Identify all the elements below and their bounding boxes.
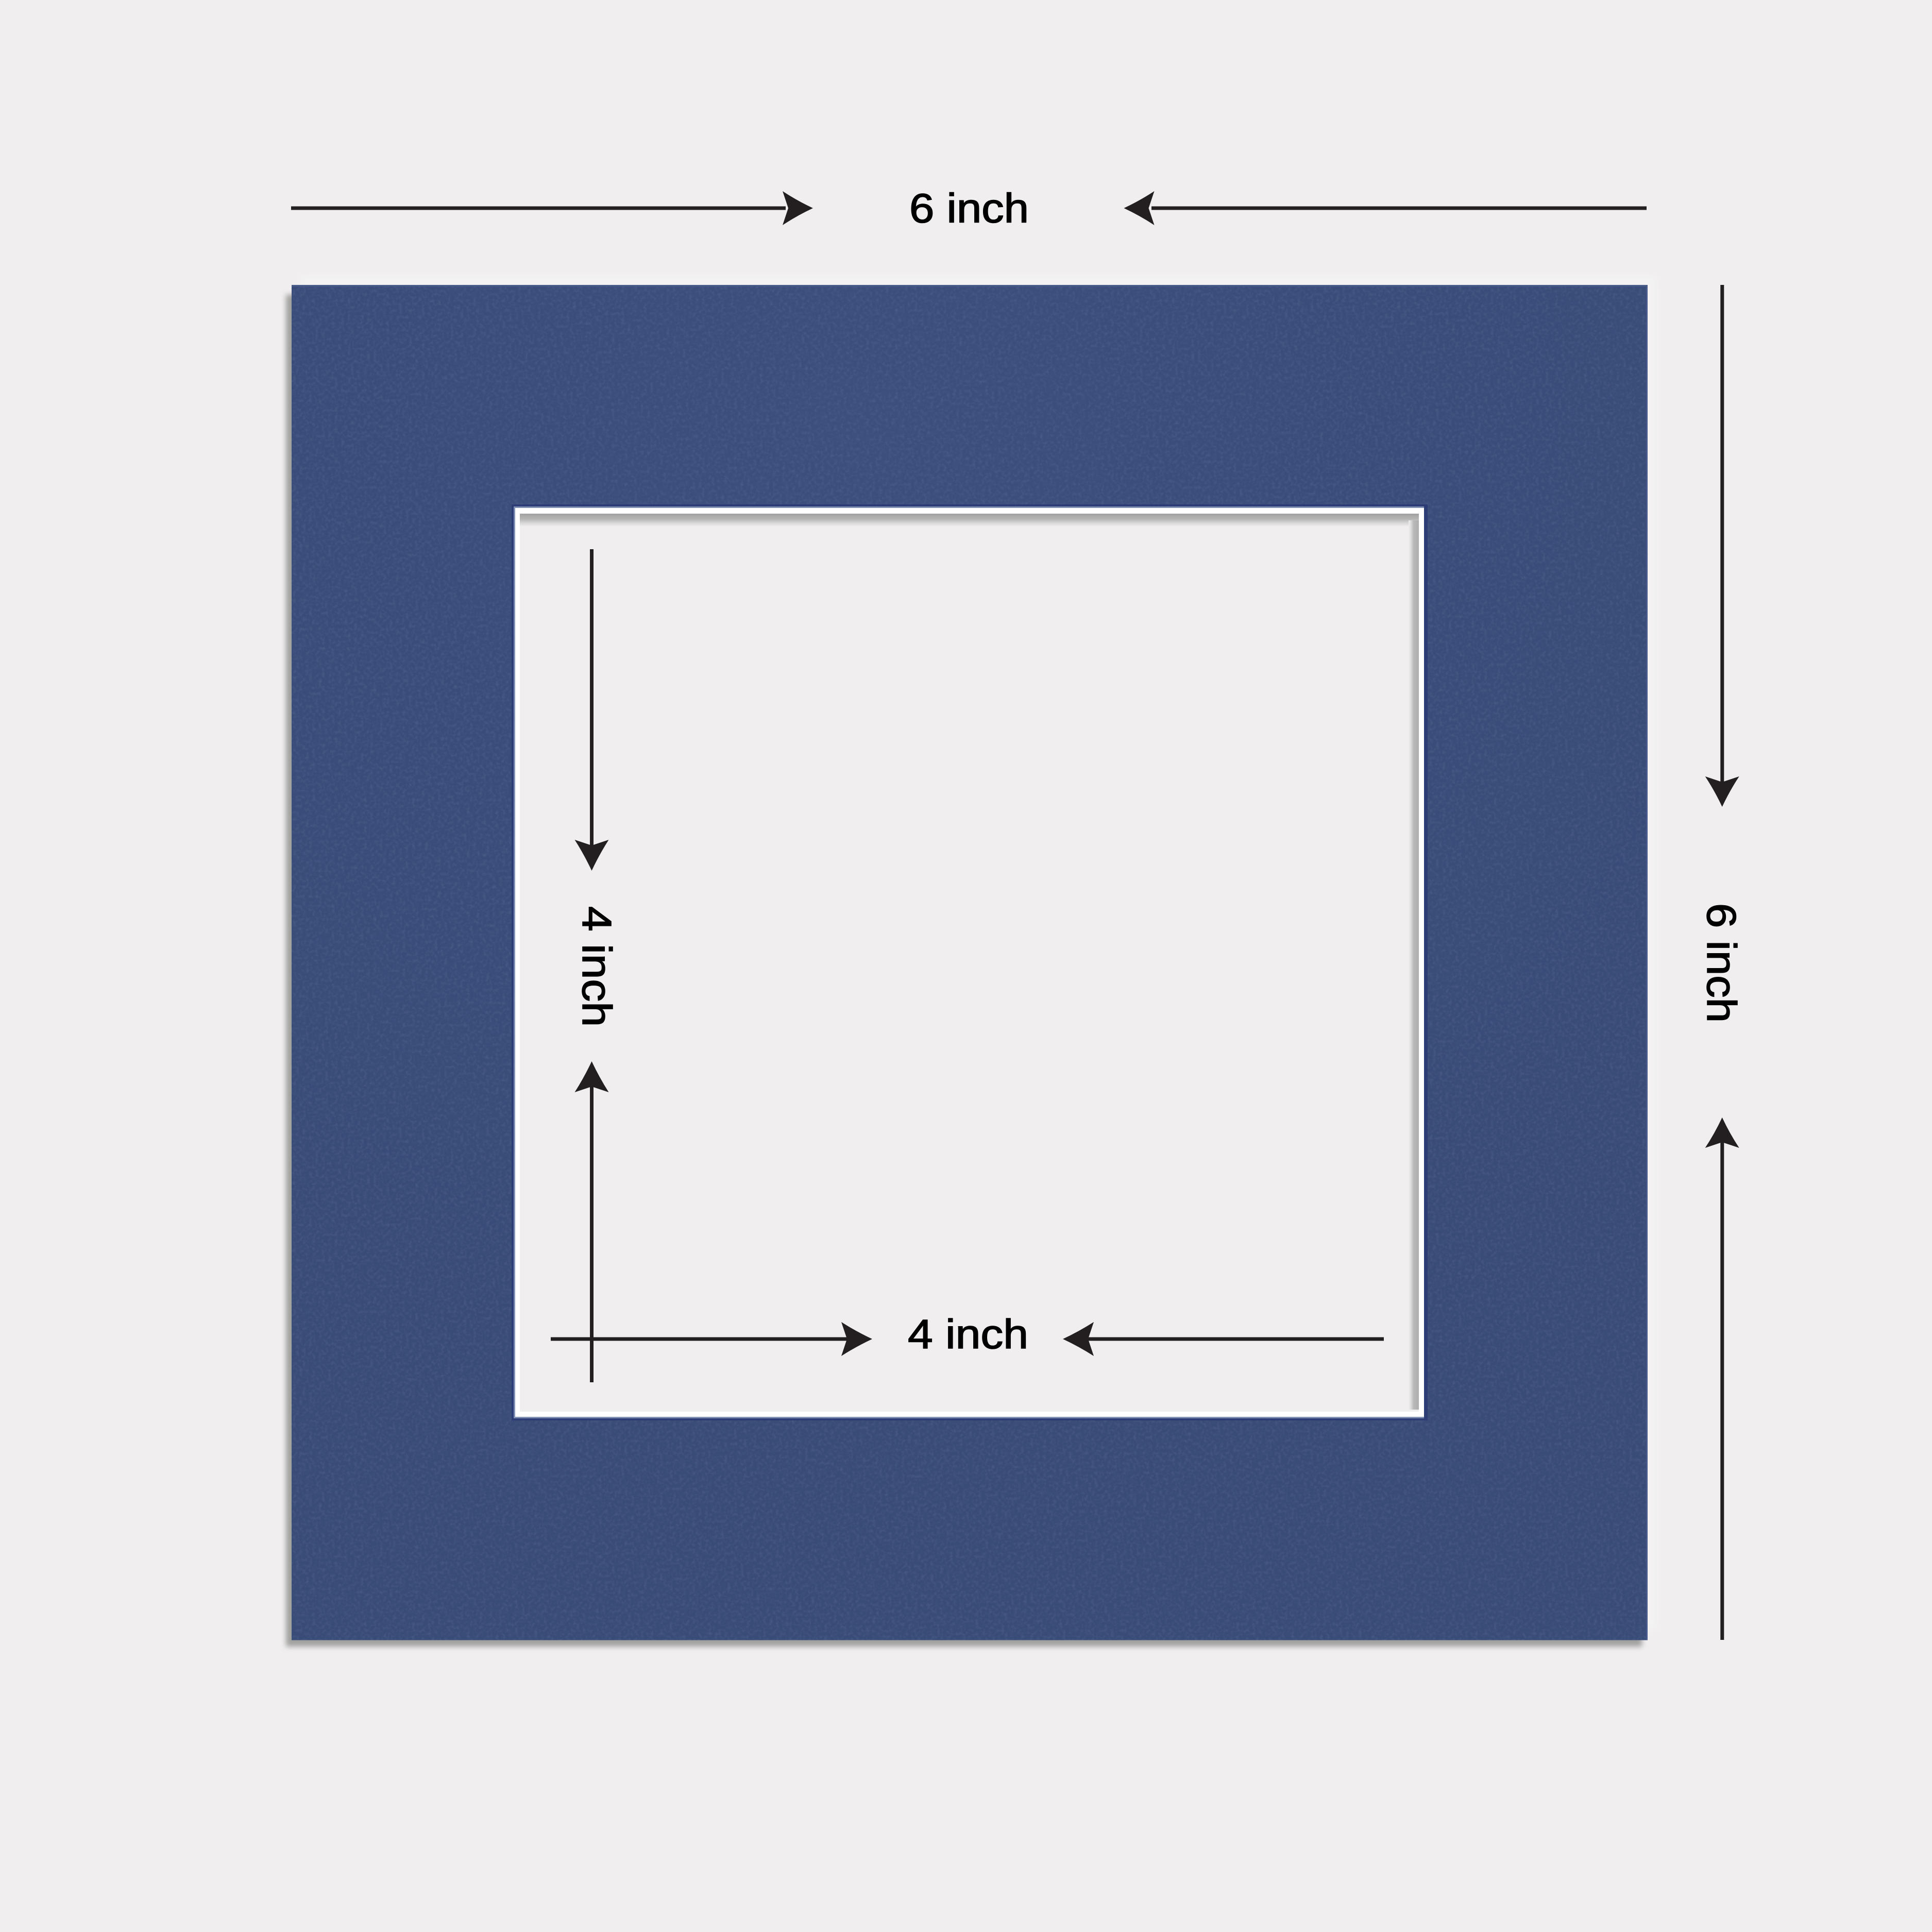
arrow: inner height, pointing up [575,1061,609,1382]
label: inner left 4 inch: 4 inch [574,906,620,1027]
label: right 6 inch: 6 inch [1699,903,1744,1023]
arrow: right height, pointing down [1705,285,1739,807]
arrow: inner width, pointing right [551,1322,872,1356]
mat drop shadow [286,295,1642,1647]
label: inner bottom 4 inch: 4 inch [908,1311,1028,1357]
arrow: top width, pointing right [291,191,813,225]
arrow: right height, pointing up [1705,1117,1739,1640]
cut opening with white bevel [512,504,1428,1420]
arrow: top width, pointing left [1124,191,1647,225]
arrow: inner height, pointing down [575,549,609,871]
mat board [292,285,1648,1640]
faint light glow on top and right of mat [299,276,1657,1631]
panel: blue photo mat with 4 inch opening [286,276,1657,1647]
arrow: inner width, pointing left [1063,1322,1384,1356]
label: top 6 inch: 6 inch [909,185,1029,231]
